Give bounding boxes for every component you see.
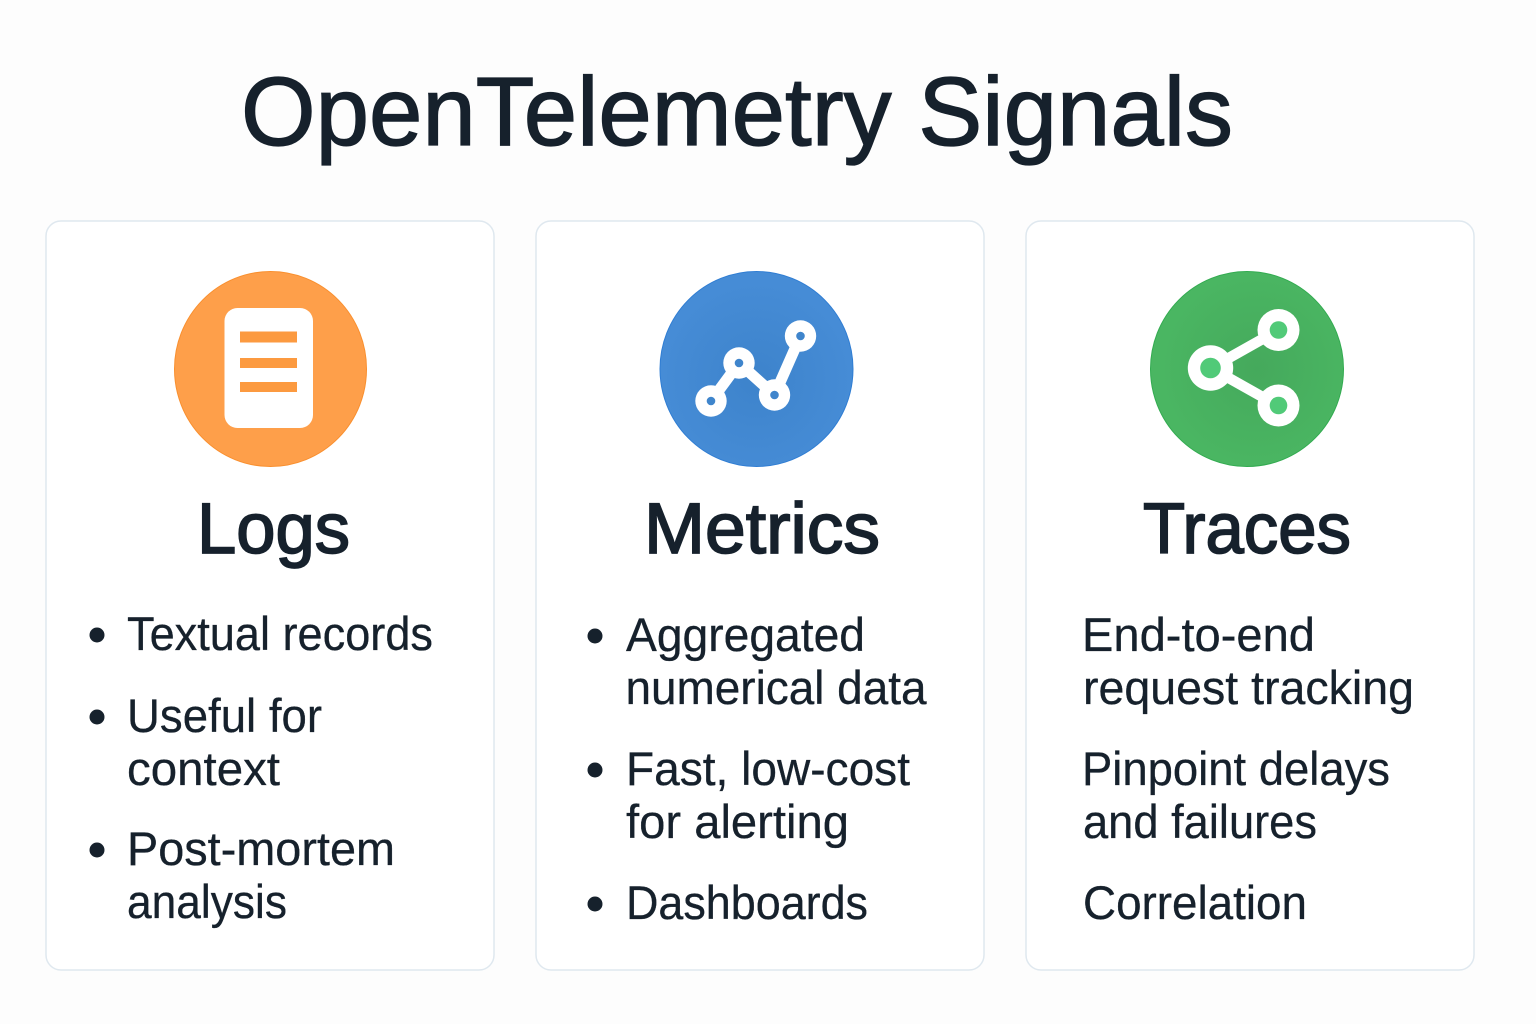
list: metrics: for alerting [626,795,849,848]
icon: traces share graph [1150,272,1344,466]
list: logs: Post-mortem [127,822,395,875]
list: traces [1082,608,1414,929]
list: metrics: numerical data [626,661,927,714]
list: logs: Useful for [127,689,322,742]
icon: metrics line chart [660,272,853,466]
list: traces: request tracking [1083,661,1414,714]
card: traces [1026,221,1474,970]
list: logs: Textual records [127,607,433,660]
panel: metrics [536,221,984,970]
card: metrics [536,221,984,970]
card: logs [46,221,494,970]
list: logs: analysis [127,875,287,928]
panel: logs [46,221,494,970]
heading: metrics: Metrics [644,490,880,569]
list: logs: context [127,742,280,795]
heading: logs: Logs [197,490,350,569]
icon: log document [174,272,366,466]
list: logs [90,607,433,928]
list: metrics: Fast, low-cost [626,742,910,795]
list: metrics [588,608,927,929]
list: metrics: Aggregated [626,608,865,661]
title: OpenTelemetry Signals [241,57,1233,166]
list: traces: Pinpoint delays [1082,742,1390,795]
list: traces: End-to-end [1082,608,1315,661]
list: traces: and failures [1083,795,1317,848]
panel: traces [1026,221,1474,970]
heading: traces: Traces [1143,490,1351,569]
list: traces: Correlation [1083,876,1307,929]
list: metrics: Dashboards [626,876,868,929]
